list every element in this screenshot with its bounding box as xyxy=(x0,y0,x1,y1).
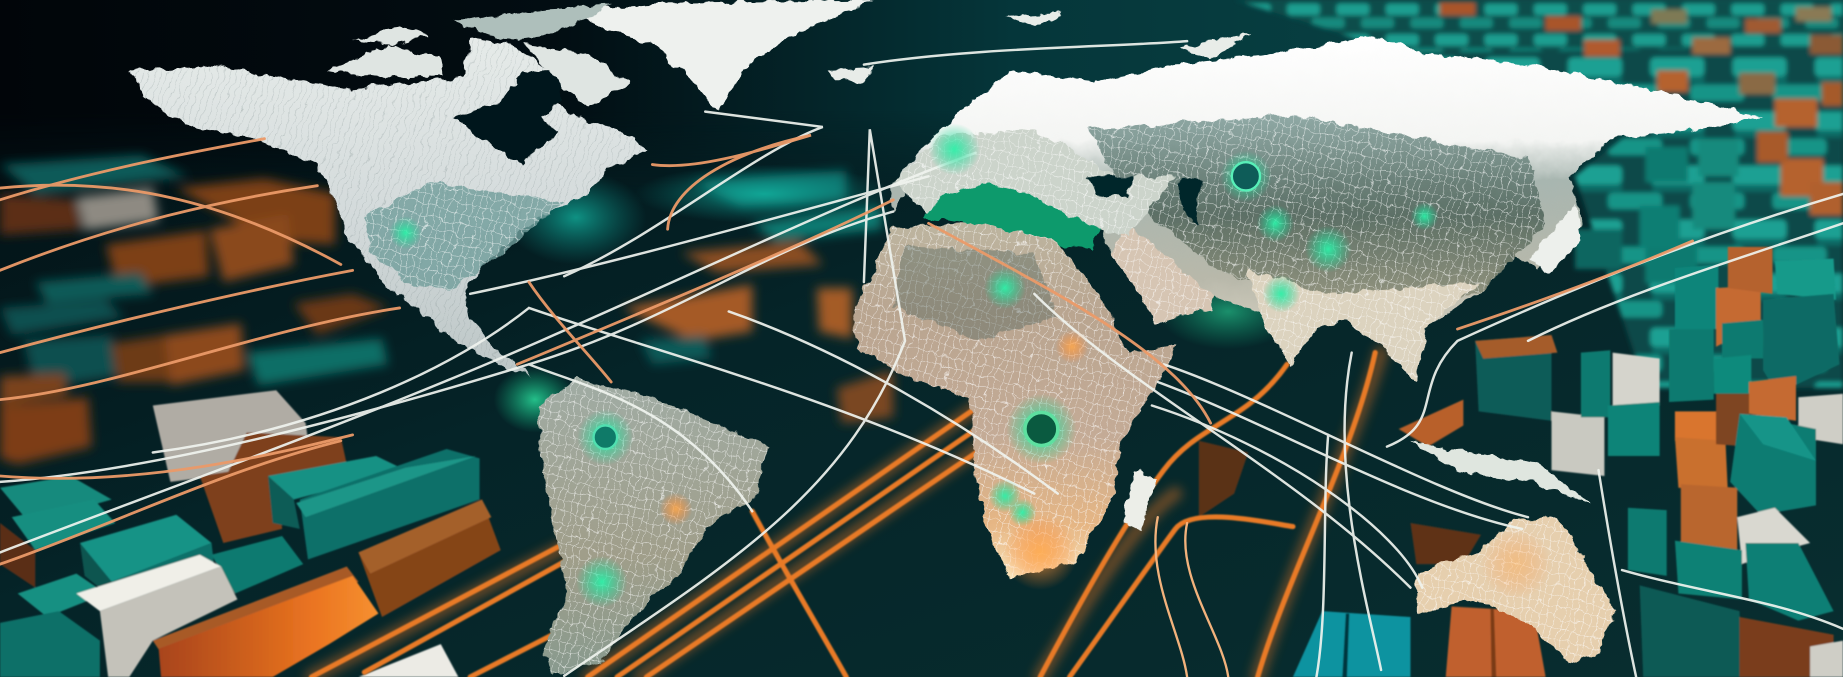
world map: North America xyxy=(129,38,646,376)
containers: foreground lower-left stack xyxy=(0,390,501,677)
world map: Arctic islands xyxy=(329,5,629,108)
containers: top-right field xyxy=(1234,0,1843,388)
teal floor glows xyxy=(494,165,1299,433)
world map: Greenland xyxy=(570,0,872,110)
green glow hotspots xyxy=(389,123,1439,608)
world map: Australia and islands xyxy=(825,13,1616,664)
network route lines: orange xyxy=(0,135,1693,564)
containers: right stacks xyxy=(1199,247,1843,677)
world map: Africa xyxy=(852,223,1175,578)
orange glow hotspots xyxy=(659,330,1552,599)
world map: Mediterranean glow xyxy=(923,186,1099,249)
world map: Eurasia xyxy=(889,35,1763,382)
glowing orange shipping lanes xyxy=(311,353,1381,677)
containers: blurred left field xyxy=(0,155,893,464)
world map: South America xyxy=(538,378,770,675)
